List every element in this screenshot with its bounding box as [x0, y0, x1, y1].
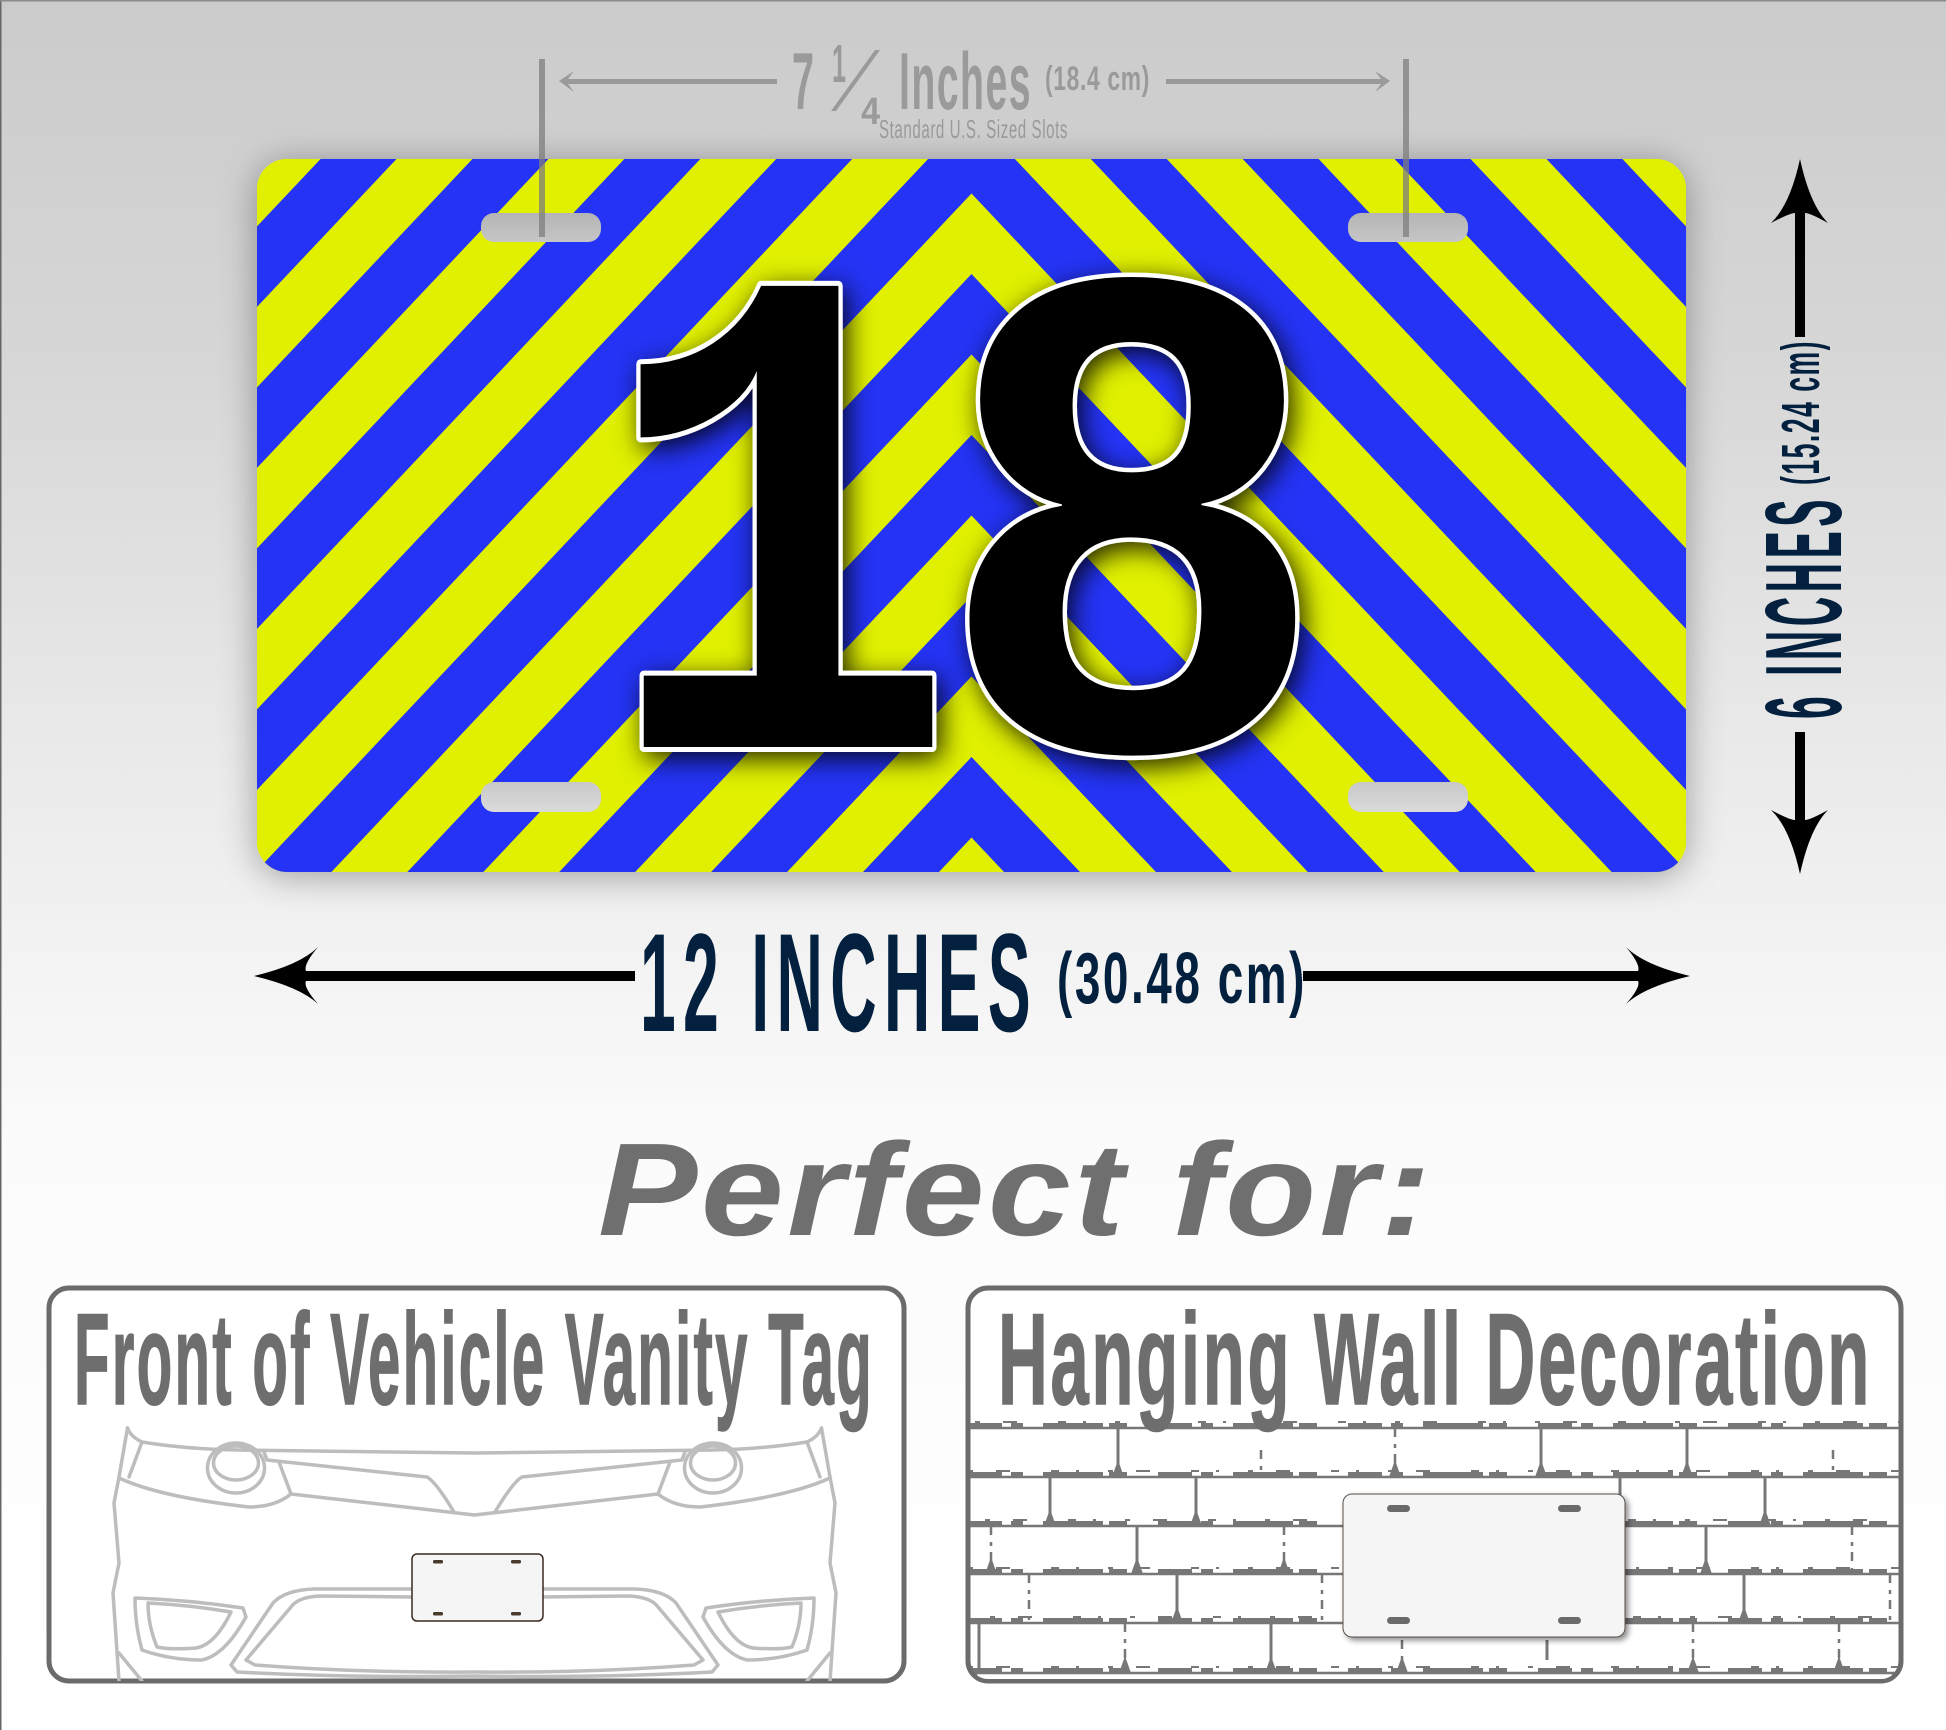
plate number 18: 8 [949, 137, 1315, 893]
plate number 18: 1 [600, 165, 958, 958]
blank plate on car [412, 1554, 543, 1621]
slot arrow left [559, 71, 777, 92]
plate number 18 [620, 259, 1325, 788]
mounting slots [481, 213, 1468, 812]
panel: hanging wall decoration [968, 1286, 1901, 1681]
width dimension arrow [254, 947, 1690, 1004]
blank plate on wall [1343, 1494, 1625, 1637]
height label [1743, 340, 1865, 719]
width label: (30.48 cm) [1057, 939, 1307, 1019]
panel: front of vehicle vanity tag [49, 1286, 904, 1681]
height dimension arrow [1771, 159, 1828, 874]
brick wall [968, 1422, 1901, 1681]
slot spacing dimension: 4 [861, 91, 880, 133]
car front line drawing [113, 1428, 836, 1681]
text: Front of Vehicle Vanity Tag [74, 1286, 874, 1432]
height label: 6 INCHES [1743, 495, 1865, 719]
text: (15.24 cm) [1771, 340, 1831, 485]
slot spacing dimension: (18.4 cm) [1045, 60, 1150, 98]
slot spacing dimension: 7 [792, 37, 814, 127]
heading: Perfect for: Perfect for: [598, 1116, 1434, 1263]
slot spacing dimension [539, 34, 1409, 237]
slot spacing dimension: 1 [832, 34, 846, 94]
slot spacing dimension: Inches [899, 37, 1032, 127]
slot spacing dimension: Standard U.S. Sized Slots [879, 114, 1068, 144]
license plate [236, 142, 1708, 898]
width label: 12 INCHES [640, 904, 1038, 1061]
slot arrow right [1166, 71, 1390, 92]
